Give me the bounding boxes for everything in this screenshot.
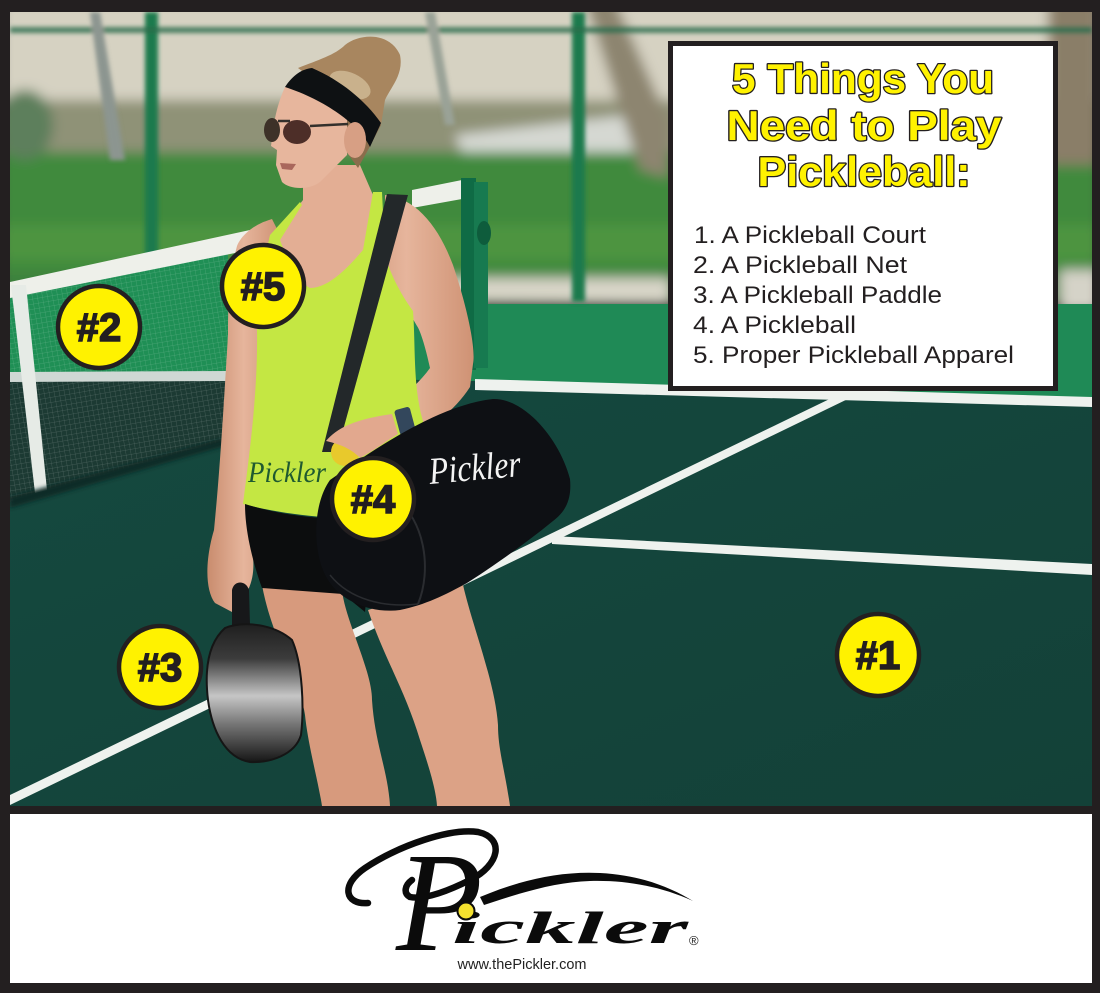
badge: #1 court: #1 [856, 634, 900, 678]
badge: #2 net: #2 [77, 306, 121, 350]
nape hair [340, 112, 381, 168]
numbered list: 5. Proper Pickleball Apparel [693, 342, 1014, 369]
pickleball paddle [207, 624, 302, 762]
torso, neck [268, 165, 385, 300]
green outer court [228, 304, 1092, 397]
court lines [10, 379, 1092, 805]
woman [207, 37, 570, 806]
title: Need to Play [726, 102, 1002, 149]
numbered list: 3. A Pickleball Paddle [693, 282, 942, 309]
head and face [271, 85, 347, 188]
badge: #2 net [58, 286, 140, 368]
logo flourish and swoosh [348, 831, 693, 905]
ear [344, 122, 366, 158]
title: 5 Things You [732, 55, 994, 102]
badge: #4 pickleball [332, 458, 414, 540]
hair bun [298, 37, 401, 125]
sunglasses [264, 118, 348, 144]
numbered list: 2. A Pickleball Net [693, 252, 907, 279]
lips [280, 163, 296, 170]
headband [285, 68, 381, 147]
dark green playing court [10, 376, 1092, 806]
panel: footer logo [10, 814, 1092, 983]
registered mark: ® [689, 933, 699, 948]
numbered list [693, 222, 1014, 369]
number badges [58, 245, 919, 708]
badge: #3 paddle: #3 [138, 646, 182, 690]
pickleball net [10, 178, 491, 508]
logo wordmark: P [395, 823, 483, 981]
panel: title and list [670, 44, 1056, 388]
blurred background: wall, grass and fence [0, 0, 1100, 312]
title [726, 55, 1002, 195]
hand and pickleball [326, 406, 416, 466]
icon: pickleball dot [458, 902, 474, 920]
viewer-left arm [207, 219, 280, 612]
title: Pickleball: [758, 148, 970, 195]
shorts [245, 504, 370, 612]
website: www.thePickler.com [457, 957, 586, 973]
badge: #3 paddle [119, 626, 201, 708]
fence posts [10, 12, 1092, 302]
duffel bag [316, 399, 570, 611]
legs [262, 585, 390, 806]
numbered list: 1. A Pickleball Court [694, 222, 926, 249]
badge: #4 pickleball: #4 [351, 478, 396, 522]
paddle grip [232, 582, 250, 625]
logo wordmark remainder: ickler [452, 902, 690, 953]
tank top logo text: Pickler [247, 456, 326, 489]
bag logo text: Pickler [426, 443, 523, 493]
viewer-right arm [339, 195, 474, 458]
shoulder strap [322, 194, 408, 452]
badge: #5 apparel: #5 [241, 265, 285, 309]
badge: #5 apparel [222, 245, 304, 327]
lime tank top [243, 192, 427, 517]
numbered list: 4. A Pickleball [693, 312, 856, 339]
badge: #1 court [837, 614, 919, 696]
